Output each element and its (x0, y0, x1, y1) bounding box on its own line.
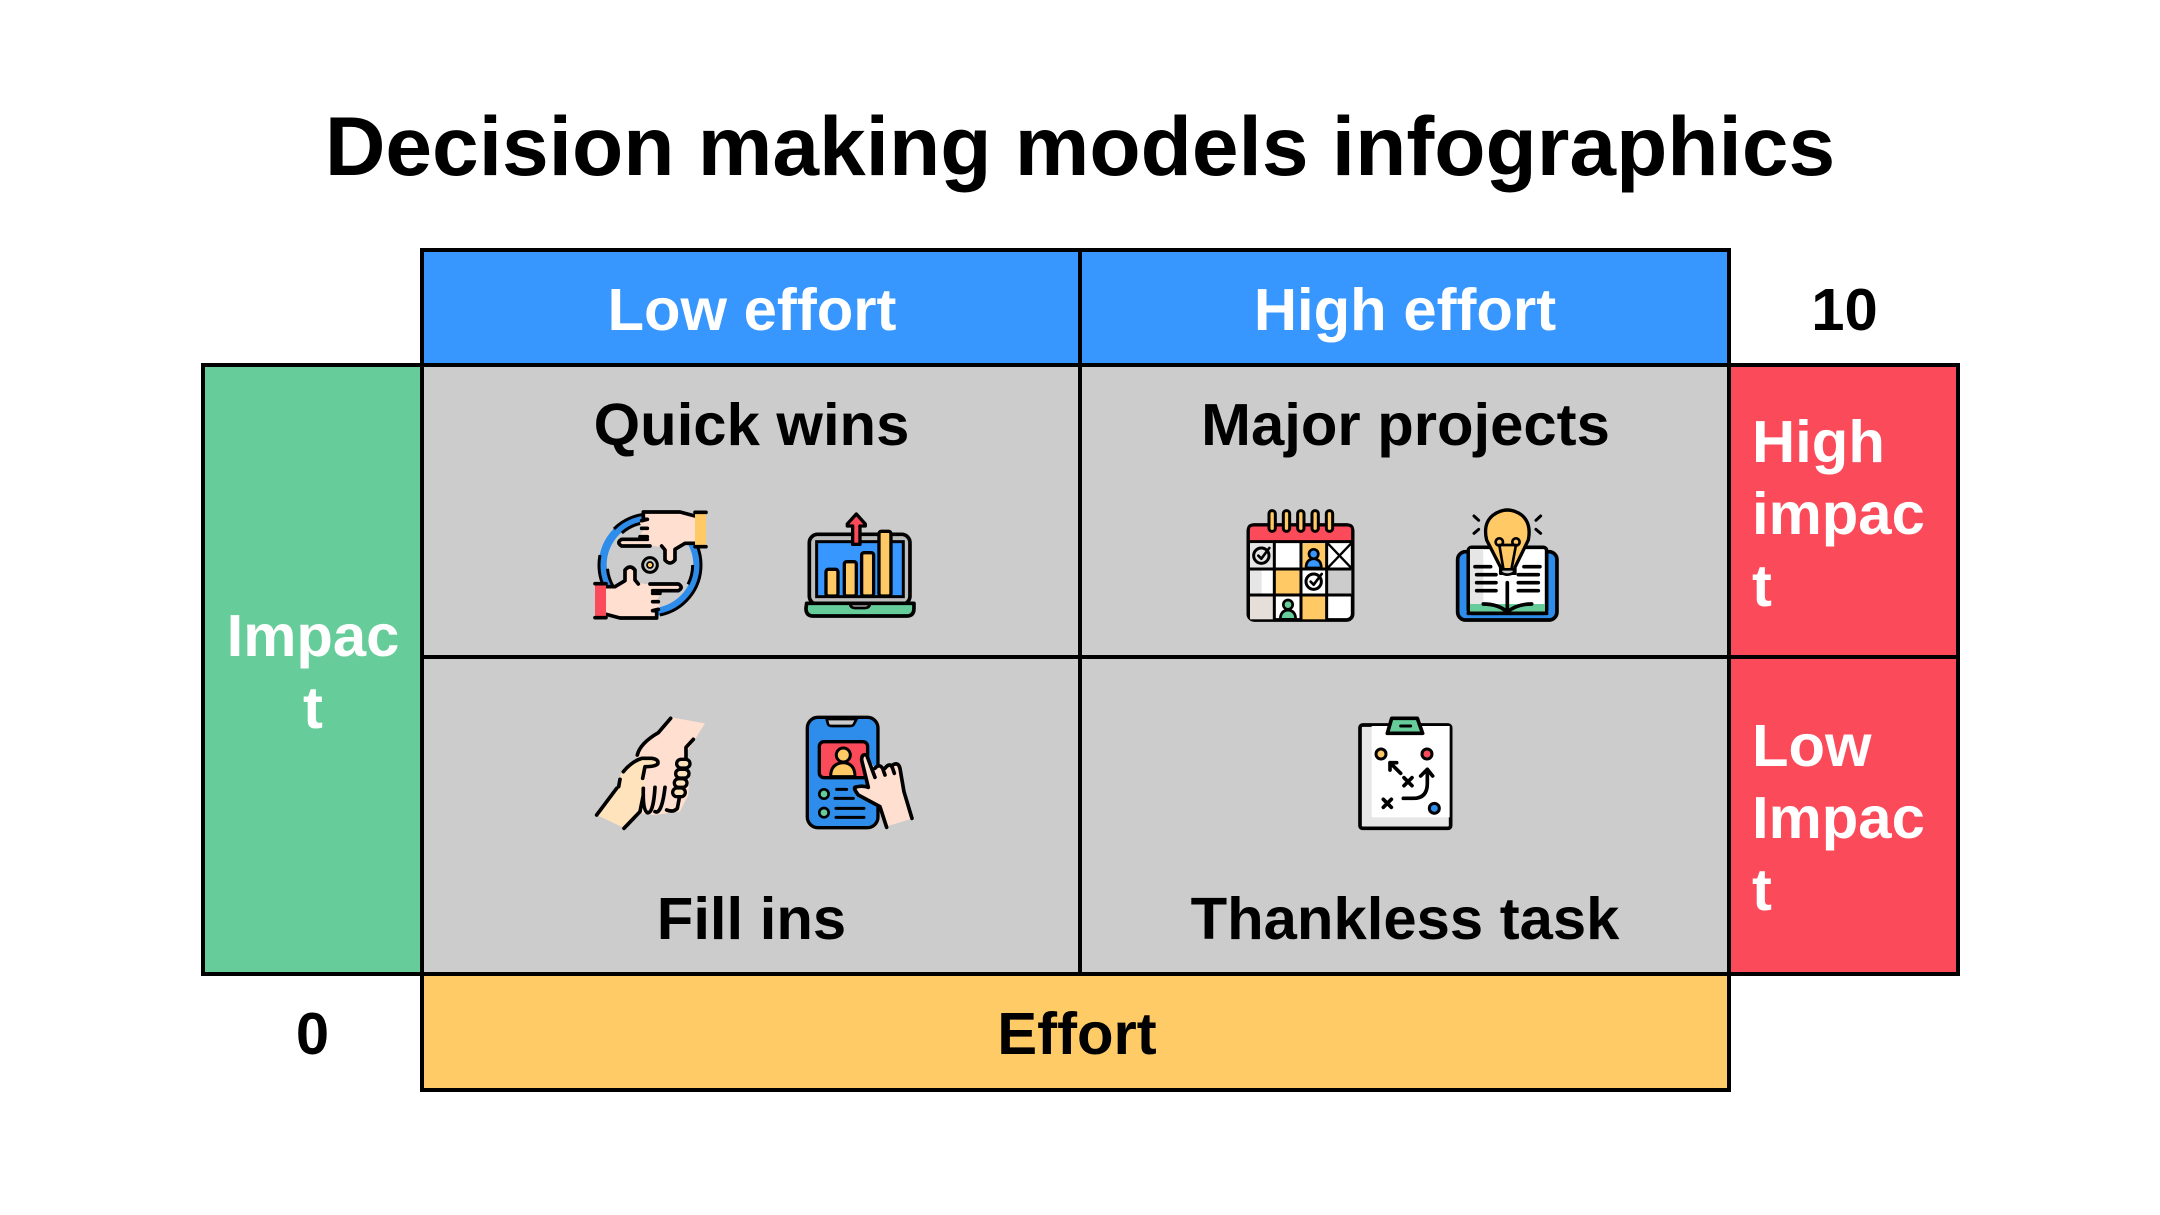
panel: high impact: High (1752, 408, 1885, 475)
icon: laptop growth chart (806, 514, 914, 616)
label: scale maximum: 10 (1811, 276, 1878, 343)
panel: major projects: Major projects (1201, 391, 1610, 458)
panel: low impact: Low (1752, 712, 1872, 779)
icon: strategy clipboard (1360, 718, 1451, 828)
title: Decision making models infographics (325, 99, 1835, 193)
panel: quick wins: Quick wins (594, 391, 909, 458)
panel: fill ins: Fill ins (657, 885, 846, 952)
panel: impact axis (203, 365, 422, 974)
panel: high impact: impac (1752, 480, 1925, 547)
panel: thankless task: Thankless task (1191, 885, 1620, 952)
panel: high impact (1729, 365, 1958, 657)
icon: calendar planner (1248, 511, 1353, 620)
panel: low impact: Impac (1752, 784, 1925, 851)
icon: hands framing target (595, 512, 706, 618)
panel: low effort header (422, 250, 1080, 365)
panel: major projects (1080, 365, 1729, 657)
panel: high effort header: High effort (1254, 276, 1556, 343)
icon: helping hands (597, 717, 705, 828)
panel: fill ins (422, 657, 1080, 974)
panel: thankless task (1080, 657, 1729, 974)
panel: impact axis: t (303, 674, 323, 741)
panel: effort axis: Effort (997, 1000, 1157, 1067)
panel: quick wins (422, 365, 1080, 657)
panel: low impact: t (1752, 856, 1772, 923)
panel: effort axis (422, 974, 1729, 1090)
label: scale minimum: 0 (296, 1000, 329, 1067)
panel: low impact (1729, 657, 1958, 974)
icon: phone profile with pointing hand (807, 717, 913, 828)
panel: low effort header: Low effort (608, 276, 897, 343)
panel: impact axis: Impac (227, 602, 399, 669)
icon: open book with light bulb (1458, 510, 1557, 620)
panel: high effort header (1080, 250, 1729, 365)
panel: high impact: t (1752, 552, 1772, 619)
